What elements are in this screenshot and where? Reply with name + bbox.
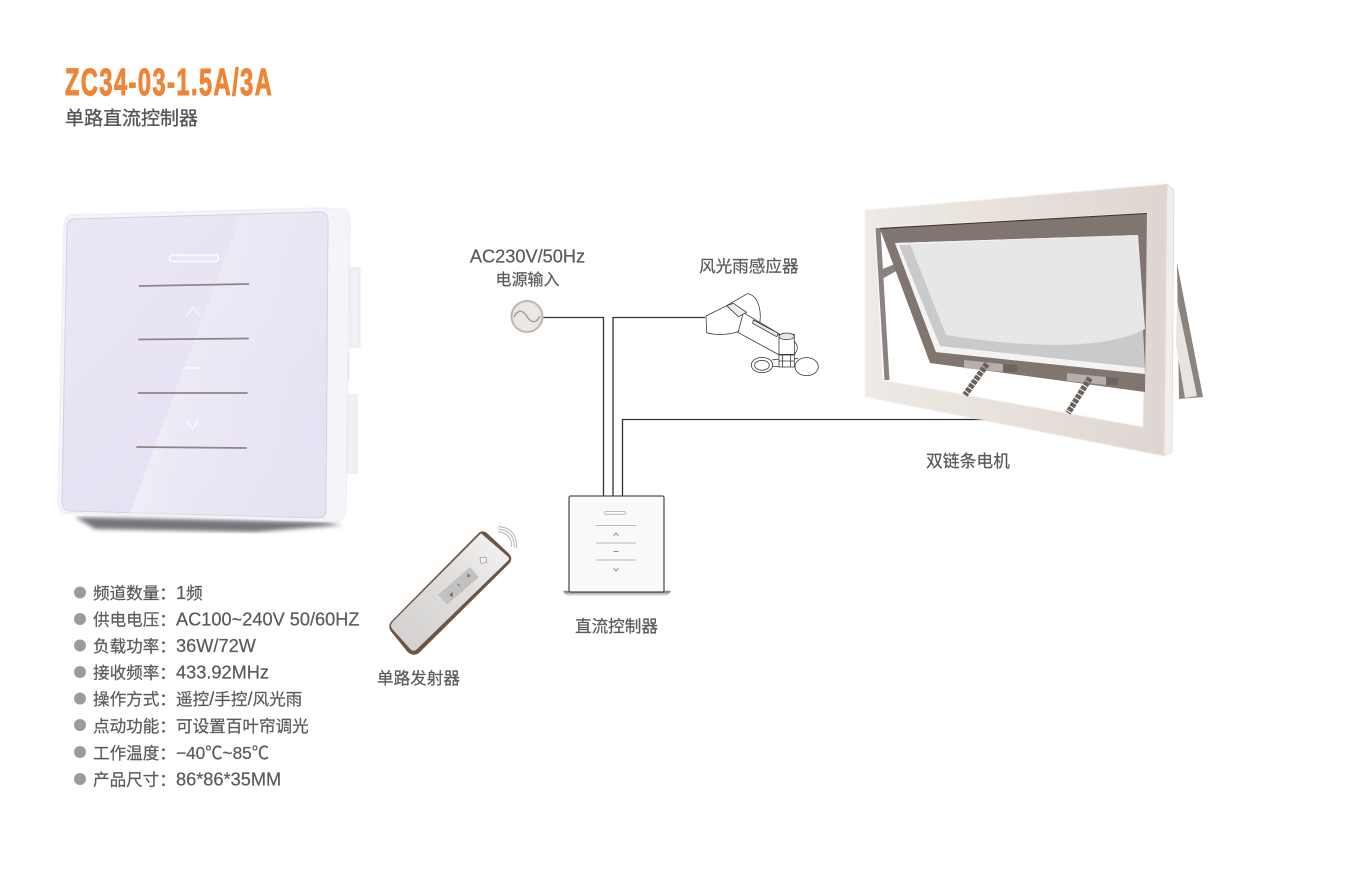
specification list [74,583,360,790]
remote body [389,531,511,655]
wiring lines [543,318,985,497]
window frame [865,184,1167,456]
sash [880,214,1147,392]
spec: supply voltage: 供电电压： [93,610,176,630]
controller shadow [563,591,671,596]
spec: channels: 频道数量： [93,584,176,603]
dark frame inner edge [878,213,1147,232]
spec: receive frequency: 接收频率： [93,664,176,682]
spec: jog function: 可设置百叶帘调光 [176,717,309,736]
spec: temperature [74,743,269,763]
spec: size: 86*86*35MM [176,770,281,790]
label: sensor: 风光雨感应器 [699,257,799,276]
label: power input: 电源输入 [495,271,560,289]
spec: operation: 操作方式： [93,690,176,709]
sash arm [880,264,898,279]
switch rear tabs [344,268,360,473]
product photo: wall switch [58,208,360,532]
glass pane [910,235,1145,345]
chain: right [1068,378,1090,413]
bracket: left [964,360,1003,372]
touch indicator [170,255,218,262]
spec: operation: 遥控/手控/风光雨 [176,689,302,709]
subtitle: 单路直流控制器 [65,108,198,130]
spec: channels [74,583,203,603]
switch body [58,208,350,522]
bracket: right [1067,373,1106,385]
label: power input [470,246,585,289]
icon: AC power source [512,301,542,332]
frame right edge [1164,184,1174,456]
spec: operation [74,689,302,709]
spec: size [74,770,281,790]
label: DC controller: 直流控制器 [575,617,658,636]
chain: left [965,364,987,395]
remote top button [480,557,487,563]
spec: size: 产品尺寸： [93,770,176,790]
spec: channels: 1频 [176,583,203,603]
controller indicator [604,512,626,514]
spec: receive frequency: 433.92MHz [176,662,269,682]
wall controller [563,496,671,596]
controller body [569,496,664,592]
label: dual chain motor: 双链条电机 [926,452,1010,471]
spec: jog function [74,717,309,736]
spec: load power: 负载功率： [93,637,176,656]
controller symbols [614,533,618,571]
remote signal arcs [498,527,517,548]
spec: receive frequency [74,662,269,682]
product: awning window with chain motors [865,184,1203,456]
spec: temperature: 工作温度： [93,744,176,763]
label: power input: AC230V/50Hz [470,246,585,266]
switch shadow [75,517,342,532]
spec: supply voltage: AC100~240V 50/60HZ [176,610,360,630]
spec: temperature: −40℃~85℃ [176,743,269,763]
opened sash side view [1177,263,1203,399]
touch symbols [186,308,200,429]
touch lines [137,284,248,448]
glass border [895,235,1145,374]
spec: supply voltage [74,610,360,630]
switch glass face [62,212,328,518]
label: transmitter: 单路发射器 [377,669,460,688]
spec: load power [74,636,257,656]
title: model number: ZC34-03-1.5A/3A [65,60,273,103]
icon: wind light rain sensor [706,294,818,376]
spec: jog function: 点动功能： [93,717,176,736]
glass inner margin [899,235,1145,368]
controller lines [596,526,636,560]
remote transmitter [389,527,517,655]
remote button pad [438,567,478,604]
switch gloss [130,212,328,518]
spec: load power: 36W/72W [176,636,257,656]
